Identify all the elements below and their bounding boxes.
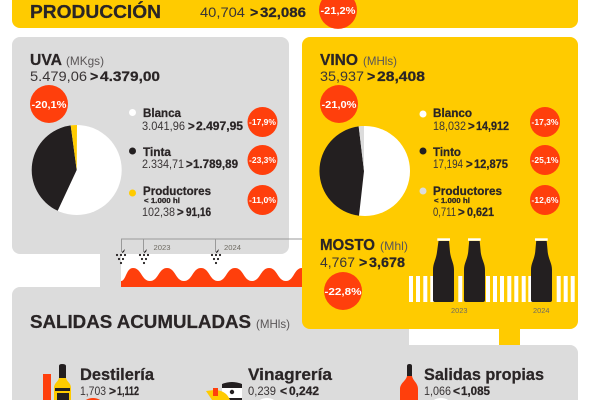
production values: 40,704 <box>200 4 245 20</box>
badge: productores uva change: -11,0% <box>249 195 276 205</box>
legend: productores vino: 0,621 <box>467 207 495 219</box>
block: destileria: 1,703 <box>80 384 106 398</box>
legend: blanca: > <box>188 121 195 133</box>
badge: vino change: -21,0% <box>322 100 357 111</box>
badge: blanco change: -17,3% <box>532 117 559 127</box>
legend: productores vino: > <box>458 207 465 219</box>
uva totals: 5.479,06 <box>30 68 87 84</box>
block: salidas propias: 1,085 <box>461 384 490 398</box>
legend: productores vino: Productores <box>433 186 502 198</box>
legend: productores: > <box>177 207 184 219</box>
icon: grapes <box>139 249 149 264</box>
label: 2023 bottles: 2023 <box>451 308 468 315</box>
heading: salidas acumuladas: SALIDAS ACUMULADAS <box>30 312 251 332</box>
heading: vino: (MHls) <box>363 54 397 68</box>
legend: tinta: 2.334,71 <box>142 159 184 171</box>
badge: productores vino change <box>530 185 560 215</box>
badge: mosto change: -22,8% <box>324 286 362 298</box>
legend: blanca: 2.497,95 <box>196 121 244 133</box>
legend: productores: < 1.000 hl <box>144 198 180 205</box>
production values: 32,086 <box>260 4 306 20</box>
legend: tinto: > <box>466 159 473 171</box>
label: 2024: 2024 <box>224 245 241 252</box>
legend: tinto: 17,194 <box>433 159 464 171</box>
heading: mosto <box>320 237 408 254</box>
chart: grape harvest timeline <box>116 239 302 287</box>
legend: productores: Productores <box>143 186 211 198</box>
badge: tinto change: -25,1% <box>532 155 559 165</box>
mosto totals: 3,678 <box>369 254 405 270</box>
label: 2024 bottles: 2024 <box>533 308 550 315</box>
panel: salidas background <box>12 250 578 400</box>
vino totals: 28,408 <box>377 68 425 84</box>
badge: tinta change: -23,3% <box>249 155 276 165</box>
legend: tinto: 12,875 <box>474 159 509 171</box>
badge: blanca change: -17,9% <box>249 117 276 127</box>
badge: productores vino change: -12,6% <box>532 195 559 205</box>
legend: tinto: Tinto <box>433 147 461 159</box>
legend: blanco: 18,032 <box>433 121 466 133</box>
badge: tinta change <box>248 145 278 175</box>
legend: productores vino: < 1.000 hl <box>434 198 470 205</box>
icon: destileria bottle <box>43 364 71 400</box>
icon: vinagreria jug and barrel <box>206 382 242 400</box>
badge: uva change <box>30 85 68 123</box>
legend: productores vino: 0,711 <box>433 207 456 219</box>
heading: uva: UVA <box>30 52 62 69</box>
pie chart: uva <box>32 125 122 215</box>
legend: blanca <box>129 108 244 133</box>
block: salidas propias: < <box>453 384 460 398</box>
heading: mosto: (Mhl) <box>380 239 408 253</box>
heading: mosto: MOSTO <box>320 237 375 254</box>
mosto totals: > <box>359 254 367 270</box>
block: salidas propias <box>424 366 544 400</box>
badge: uva change: -20,1% <box>32 100 67 111</box>
legend: productores vino <box>420 186 502 219</box>
badge: production change: -21,2% <box>320 6 356 17</box>
block: destileria <box>80 366 155 400</box>
badge: blanca change <box>248 107 278 137</box>
badge: productores uva change <box>248 185 278 215</box>
heading: uva <box>30 52 104 69</box>
block: destileria: Destilería <box>80 366 155 384</box>
badge: mosto change <box>324 272 362 310</box>
chart: must bottles timeline <box>409 238 575 315</box>
vino totals: > <box>367 68 375 84</box>
vino totals: 35,937 <box>320 68 364 84</box>
heading: vino <box>320 52 397 69</box>
legend: productores: 91,16 <box>186 207 211 219</box>
icon: grapes <box>211 249 221 264</box>
legend: blanco: Blanco <box>433 108 472 120</box>
block: vinagreria: 0,239 <box>248 384 276 398</box>
bottle 2023 <box>433 238 454 302</box>
legend: tinta: > <box>186 159 193 171</box>
legend: productores: 102,38 <box>142 207 175 219</box>
block: destileria: > <box>109 384 116 398</box>
bottle 2024 <box>531 238 552 302</box>
block: vinagreria: < <box>280 384 287 398</box>
mosto totals: 4,767 <box>320 254 355 270</box>
production values <box>200 4 306 20</box>
block: vinagreria <box>248 366 333 400</box>
uva totals <box>30 68 160 84</box>
uva totals: 4.379,00 <box>100 68 160 84</box>
badge: production change <box>319 0 357 29</box>
legend: blanca: 3.041,96 <box>142 121 185 133</box>
badge: tinto change <box>530 145 560 175</box>
legend: blanco: > <box>468 121 475 133</box>
legend: tinta <box>129 147 238 171</box>
bottle 2023 second <box>464 238 485 302</box>
icon: salidas propias bottle <box>400 364 418 400</box>
heading: vino: VINO <box>320 52 358 69</box>
block: salidas propias: 1,066 <box>424 384 451 398</box>
heading: produccion: PRODUCCIÓN <box>30 1 161 22</box>
heading: salidas acumuladas: (MHls) <box>256 317 290 331</box>
block: vinagreria: Vinagrería <box>248 366 333 384</box>
legend: blanco <box>420 108 509 133</box>
legend: blanco: 14,912 <box>476 121 509 133</box>
legend: blanca: Blanca <box>143 108 182 120</box>
block: salidas propias: Salidas propias <box>424 366 544 384</box>
block: destileria: 1,112 <box>117 384 139 398</box>
legend: productores <box>129 186 211 219</box>
panel: uva <box>12 37 289 254</box>
block: vinagreria: 0,242 <box>289 384 319 398</box>
legend: tinto <box>420 147 509 171</box>
icon: grapes <box>116 249 126 264</box>
legend: tinta: Tinta <box>143 147 172 159</box>
heading: uva: (MKgs) <box>66 54 104 68</box>
uva totals: > <box>90 68 98 84</box>
production values: > <box>250 4 258 20</box>
badge: blanco change <box>530 107 560 137</box>
legend: tinta: 1.789,89 <box>193 159 238 171</box>
panel: produccion banner <box>12 0 578 29</box>
panel: vino <box>302 37 578 345</box>
badge: vino change <box>320 85 358 123</box>
mosto totals <box>320 254 405 270</box>
pie chart: vino <box>319 126 410 216</box>
label: 2023: 2023 <box>154 245 171 252</box>
vino totals <box>320 68 425 84</box>
